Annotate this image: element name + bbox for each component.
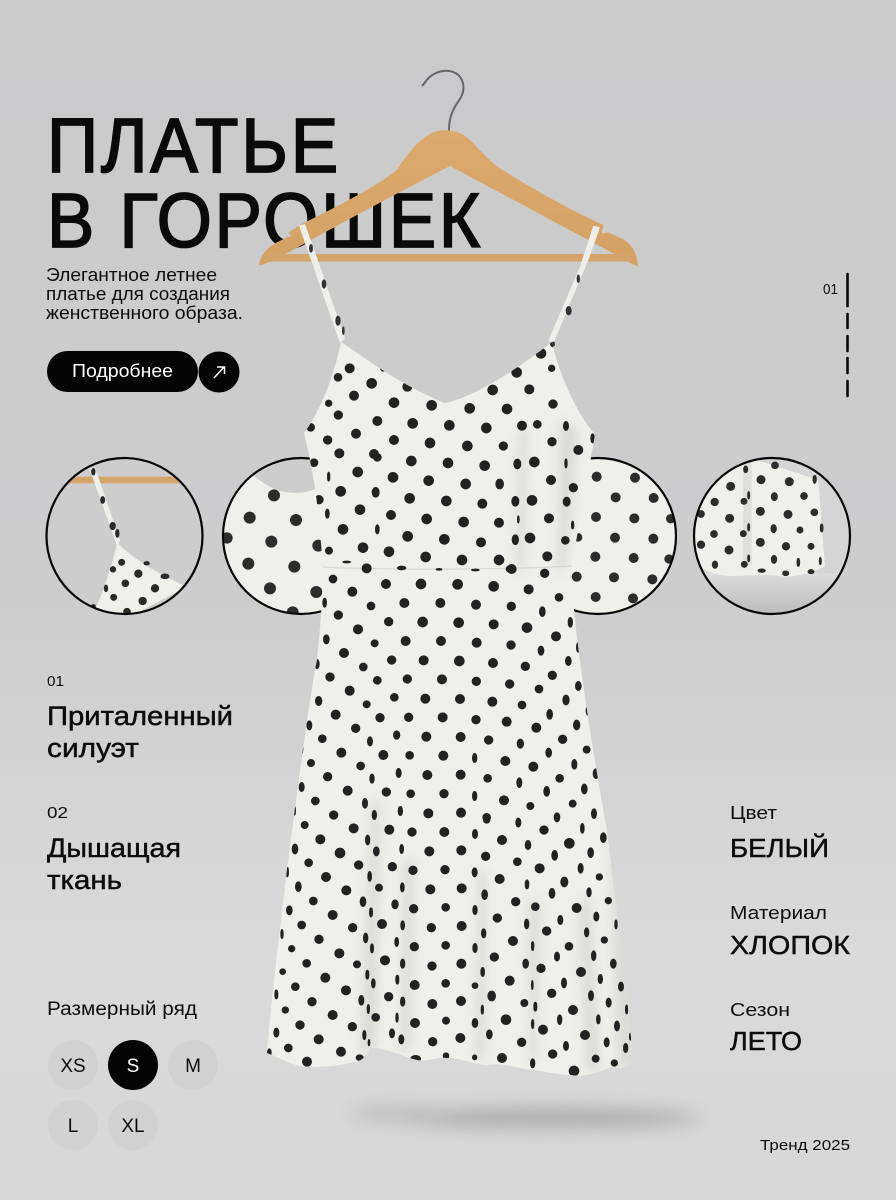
step marker 01 xyxy=(823,274,848,396)
size selector xyxy=(48,1040,218,1150)
hanger body xyxy=(259,130,638,267)
feature 01: 01 xyxy=(47,673,64,690)
feature 02: ткань xyxy=(47,865,122,895)
detail circle: strap xyxy=(46,458,202,617)
feature 02: 02 xyxy=(47,805,68,822)
feature 01 xyxy=(47,673,233,763)
left strap xyxy=(299,224,345,343)
fabric folds xyxy=(268,341,640,1076)
size selector: L xyxy=(68,1116,78,1137)
description text: Элегантное летнее xyxy=(46,265,217,285)
spec: season xyxy=(730,1000,802,1056)
spec: material: Материал xyxy=(730,903,827,923)
spec: material xyxy=(730,903,850,960)
feature 01: силуэт xyxy=(47,733,139,763)
detail circle: fabric xyxy=(571,456,678,616)
size selector: XL xyxy=(121,1116,145,1137)
button: Подробнее xyxy=(47,351,198,392)
trend label: Тренд 2025 xyxy=(760,1137,850,1154)
spec: season: ЛЕТО xyxy=(730,1026,802,1056)
hanger xyxy=(259,71,638,267)
title xyxy=(47,103,483,264)
polka dots: neckline xyxy=(326,341,557,419)
step marker 01: 01 xyxy=(823,282,838,298)
spec: color xyxy=(730,803,829,863)
button: Подробнее: Подробнее xyxy=(72,361,173,381)
description text: женственного образа. xyxy=(46,303,243,323)
description text: платье для создания xyxy=(46,284,230,304)
size selector: XS xyxy=(60,1056,86,1077)
feature 02: Дышащая xyxy=(47,833,181,863)
description text xyxy=(46,265,243,323)
feature 01: Приталенный xyxy=(47,701,233,731)
spec: material: ХЛОПОК xyxy=(730,930,850,960)
title: В ГОРОШЕК xyxy=(47,178,483,264)
hanger hook xyxy=(423,71,463,131)
spec: color: БЕЛЫЙ xyxy=(730,833,829,863)
size selector: M xyxy=(185,1056,201,1077)
icon: arrow button xyxy=(198,352,240,392)
size selector: S xyxy=(127,1056,139,1077)
polka dots: upper skirt xyxy=(293,564,599,822)
dress xyxy=(267,341,640,1076)
spec: color: Цвет xyxy=(730,803,777,823)
feature 02 xyxy=(47,805,181,895)
polka dots: bodice xyxy=(307,417,594,572)
spec: season: Сезон xyxy=(730,1000,790,1020)
right strap xyxy=(548,226,600,346)
floor shadow xyxy=(350,1108,700,1128)
polka dots: lower skirt xyxy=(268,817,631,1076)
title: ПЛАТЬЕ xyxy=(47,103,341,189)
detail circle: bodice xyxy=(222,456,323,616)
detail circle: hem xyxy=(690,457,853,617)
dress body xyxy=(267,342,632,1076)
hanger bar xyxy=(267,254,632,262)
size heading: Размерный ряд xyxy=(47,999,197,1020)
waist seam xyxy=(323,566,572,569)
